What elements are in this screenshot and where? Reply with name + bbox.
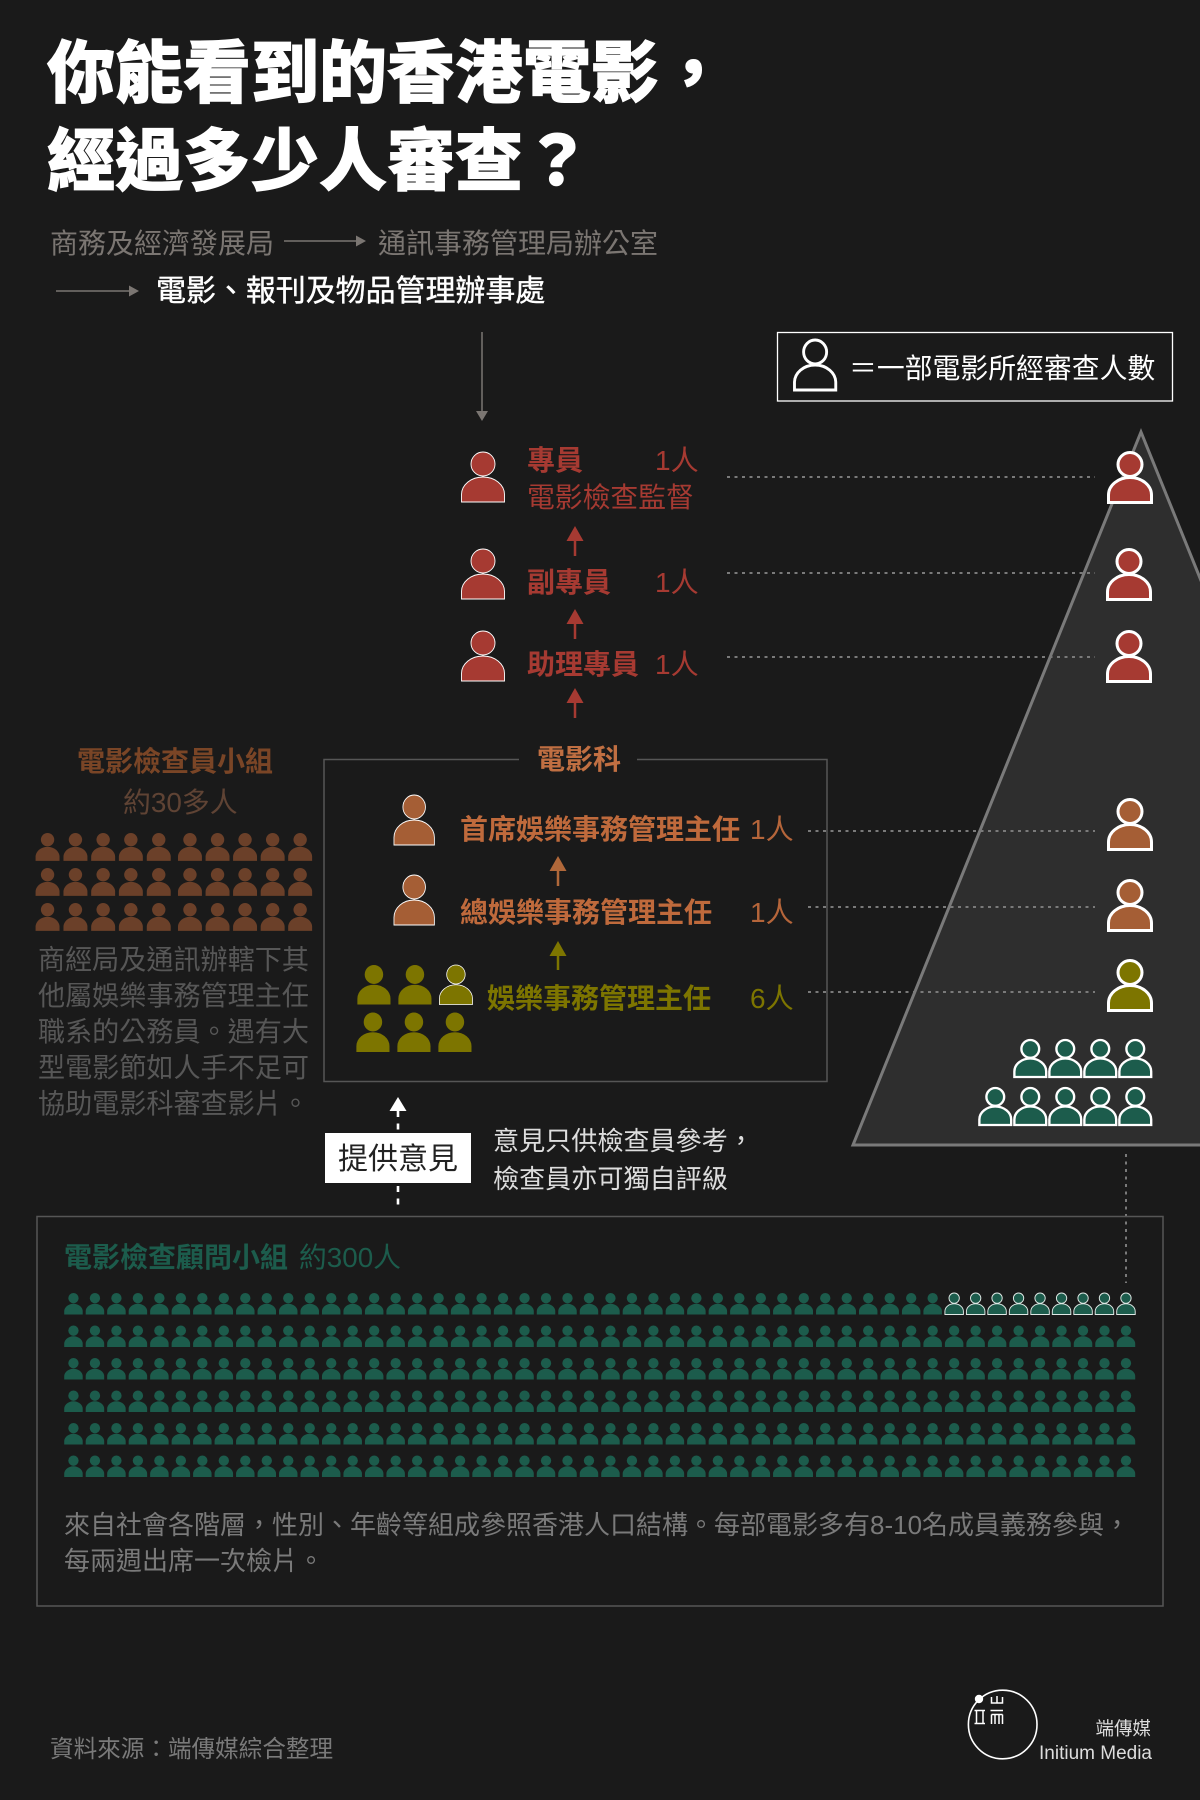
count: 1人 xyxy=(750,814,794,845)
description: 他屬娛樂事務管理主任 xyxy=(38,980,309,1011)
icon: red person xyxy=(462,452,504,502)
icon: assistant xyxy=(1108,632,1150,682)
chief officer row xyxy=(394,795,794,845)
description: 協助電影科審查影片。 xyxy=(38,1088,309,1119)
label: film censorship supervisor: 電影檢查監督 xyxy=(527,482,694,513)
officer tier: assistant commissioner xyxy=(462,631,699,681)
pyramid persons: advisers xyxy=(979,1040,1151,1125)
pyramid xyxy=(853,432,1200,1145)
note: opinions for reference: 意見只供檢查員參考， xyxy=(493,1126,754,1156)
arrow: office down to officers xyxy=(476,332,488,421)
description: 商經局及通訊辦轄下其 xyxy=(38,944,309,975)
officer tier: deputy commissioner xyxy=(462,549,699,599)
arrow: to film office xyxy=(56,286,139,296)
description xyxy=(64,1510,1130,1576)
heading: 電影檢查員小組 xyxy=(77,746,273,777)
count: 約30多人 xyxy=(123,787,238,818)
department: film office: 電影、報刊及物品管理辦事處 xyxy=(156,275,545,308)
panel heading: 電影科 xyxy=(537,744,621,775)
heading: 電影檢查顧問小組 xyxy=(64,1242,288,1273)
description: 職系的公務員。遇有大 xyxy=(38,1016,309,1047)
icon: outlined person xyxy=(794,340,836,390)
note: opinions for reference xyxy=(493,1126,754,1194)
logo text: 端傳媒 xyxy=(1095,1718,1151,1739)
feedback arrow xyxy=(390,1097,406,1207)
description: 每兩週出席一次檢片。 xyxy=(64,1546,324,1576)
count: 1人 xyxy=(750,897,794,928)
callout: provide opinions: 提供意見 xyxy=(338,1143,458,1176)
arrow: up to assistant xyxy=(566,688,584,718)
icon: brown person xyxy=(394,875,434,925)
logo: Initium Media xyxy=(968,1690,1152,1764)
icon: red person xyxy=(462,549,504,599)
title xyxy=(47,36,727,200)
description xyxy=(38,944,309,1119)
source note: 資料來源：端傳媒綜合整理 xyxy=(50,1736,333,1763)
icon: entertainment officer xyxy=(1108,960,1152,1010)
department chain xyxy=(50,228,658,308)
panel: censor panel xyxy=(36,746,312,1119)
count: 1人 xyxy=(655,567,699,598)
description: 型電影節如人手不足可 xyxy=(38,1052,309,1083)
icon grid: 30 censors xyxy=(36,833,312,931)
label: senior entertainment officer: 總娛樂事務管理主任 xyxy=(460,897,712,928)
icon: deputy xyxy=(1108,550,1150,600)
department: commerce bureau: 商務及經濟發展局 xyxy=(50,228,274,259)
arrow: up to deputy xyxy=(566,609,584,639)
logo mark xyxy=(968,1690,1037,1759)
arrow: up to chief xyxy=(550,856,566,886)
senior officer row xyxy=(394,875,794,928)
panel: advisory panel xyxy=(37,1216,1163,1606)
label: assistant commissioner: 助理專員 xyxy=(527,649,639,680)
icon: brown person xyxy=(394,795,434,845)
description: 來自社會各階層，性別、年齡等組成參照香港人口結構。每部電影多有8-10名成員義務參與， xyxy=(64,1510,1130,1540)
arrow: up to commissioner xyxy=(566,526,584,556)
arrow: commerce to CEDB office xyxy=(284,236,366,246)
title: 你能看到的香港電影， xyxy=(47,36,727,112)
department: communications office: 通訊事務管理局辦公室 xyxy=(378,228,658,259)
icon: red person xyxy=(462,631,504,681)
count: 1人 xyxy=(655,445,699,476)
dotted connector lines xyxy=(727,477,1126,1283)
logo: Initium Media: Initium Media xyxy=(1039,1743,1152,1764)
label: entertainment officers: 娛樂事務管理主任 xyxy=(487,983,711,1014)
panel: film section xyxy=(324,744,827,1082)
label: commissioner: 專員 xyxy=(527,445,583,476)
legend text: ＝一部電影所經審查人數 xyxy=(849,353,1155,384)
legend xyxy=(778,332,1172,401)
icon: chief officer xyxy=(1108,800,1152,850)
officer tier: commissioner xyxy=(462,445,699,513)
count: 1人 xyxy=(655,649,699,680)
icon group: six olive persons xyxy=(356,965,472,1052)
note: opinions for reference: 檢查員亦可獨自評級 xyxy=(493,1164,728,1194)
icon grid: 300 advisers xyxy=(64,1293,1135,1477)
arrow: up to senior xyxy=(550,941,566,970)
label: deputy commissioner: 副專員 xyxy=(527,567,611,598)
callout: provide opinions xyxy=(325,1133,471,1183)
entertainment officers row xyxy=(356,965,794,1052)
icon: commissioner xyxy=(1108,452,1152,502)
icon: senior officer xyxy=(1108,880,1152,930)
count: 約300人 xyxy=(299,1242,401,1273)
label: chief entertainment officer: 首席娛樂事務管理主任 xyxy=(460,814,740,845)
title: 經過多少人審查？ xyxy=(47,124,591,200)
count: 6人 xyxy=(750,983,794,1014)
pyramid persons: officers xyxy=(1108,452,1152,1010)
